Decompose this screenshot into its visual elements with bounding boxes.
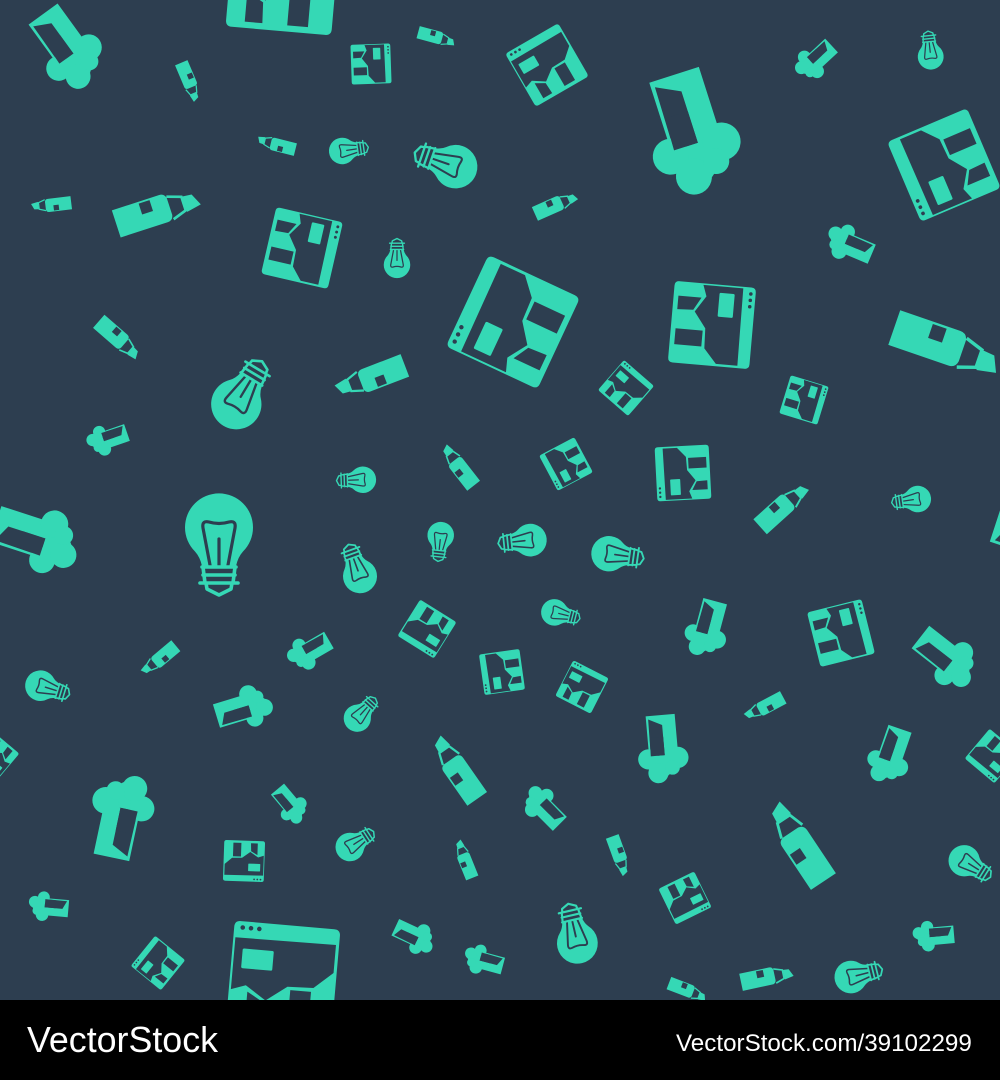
icon: chef hat bbox=[820, 218, 879, 270]
icon: chef hat bbox=[27, 890, 70, 923]
icon: chef hat bbox=[83, 418, 132, 460]
icon: chef hat bbox=[81, 768, 161, 864]
icon: browser map window bbox=[887, 108, 1000, 222]
icon: browser map window bbox=[807, 599, 875, 667]
icon: marker pen bbox=[753, 478, 812, 534]
icon: light bulb bbox=[589, 534, 646, 576]
icon: large marker pen bbox=[888, 310, 1000, 381]
icon: light bulb bbox=[831, 953, 886, 997]
icon: chef hat bbox=[912, 919, 955, 953]
icon: browser map window bbox=[479, 649, 525, 695]
icon: light bulb bbox=[943, 839, 999, 890]
icon: marker pen bbox=[667, 977, 709, 1004]
icon: browser map window bbox=[539, 437, 593, 491]
icon: browser map window bbox=[598, 360, 654, 416]
icon: browser map window wrapped at top edge bbox=[226, 0, 340, 35]
icon: browser map window bbox=[350, 43, 392, 85]
icon: marker pen bbox=[606, 834, 633, 877]
icon: chef hat bbox=[460, 941, 507, 980]
icon: chef hat bbox=[516, 779, 572, 836]
icon: light bulb bbox=[202, 348, 284, 439]
icon: marker pen bbox=[31, 196, 72, 214]
icon: chef hat bbox=[788, 33, 842, 87]
icon: light bulb bbox=[21, 667, 74, 709]
icon: browser map window bbox=[779, 375, 829, 425]
icon: chef hat bbox=[210, 680, 277, 737]
icon: marker pen bbox=[139, 640, 180, 679]
icon: light bulb bbox=[425, 521, 455, 563]
icon: light bulb bbox=[332, 539, 382, 598]
icon: large browser map window bbox=[226, 921, 340, 1035]
icon: browser map window wrapped at left edge bbox=[0, 729, 19, 783]
icon: marker pen bbox=[742, 691, 787, 724]
icon: browser map window bbox=[131, 936, 185, 990]
icon: browser map window bbox=[668, 281, 756, 369]
icon: chef hat bbox=[266, 780, 314, 829]
icon: light bulb bbox=[338, 689, 385, 737]
icon: browser map window bbox=[261, 207, 343, 289]
icon: browser map window bbox=[505, 23, 589, 107]
icon: light bulb bbox=[384, 238, 410, 278]
icon: browser map window bbox=[397, 599, 457, 659]
icon: light bulb bbox=[336, 466, 377, 494]
icon: chef hat bbox=[0, 494, 88, 582]
icon: browser map window bbox=[658, 871, 712, 925]
icon: browser map window bbox=[555, 660, 609, 714]
icon: marker pen bbox=[451, 838, 478, 880]
icon: light bulb bbox=[496, 522, 548, 560]
icon: marker pen bbox=[333, 354, 409, 403]
icon: chef hat wrapped at right edge bbox=[985, 494, 1000, 582]
icon: chef hat bbox=[861, 722, 920, 789]
icon: large light bulb bbox=[185, 493, 253, 595]
icon: marker pen bbox=[256, 134, 297, 156]
icon: chef hat bbox=[388, 913, 440, 960]
icon: large browser map window bbox=[446, 255, 580, 389]
icon: light bulb bbox=[330, 820, 381, 867]
icon: chef hat bbox=[905, 618, 988, 698]
icon: chef hat bbox=[17, 0, 117, 100]
icon: browser map window bbox=[655, 445, 711, 501]
icon: light bulb bbox=[890, 484, 933, 516]
icon: marker pen bbox=[532, 189, 580, 221]
icon: light bulb bbox=[548, 899, 602, 968]
icon: browser map window bbox=[223, 840, 265, 882]
icon: large marker pen bbox=[760, 798, 836, 890]
icon: chef hat bbox=[634, 713, 691, 785]
footer brand wordmark: VectorStock bbox=[27, 1020, 218, 1060]
icon: light bulb bbox=[538, 596, 583, 632]
footer bar bbox=[27, 1020, 972, 1060]
icon: chef hat bbox=[680, 596, 735, 661]
footer image id: VectorStock.com/39102299 bbox=[676, 1030, 972, 1057]
icon: light bulb bbox=[408, 132, 483, 194]
icon: marker pen bbox=[437, 442, 480, 491]
icon: marker pen bbox=[426, 732, 487, 806]
icon: light bulb bbox=[327, 134, 370, 166]
icon: marker pen bbox=[739, 963, 794, 991]
icon: chef hat bbox=[282, 625, 337, 677]
icon: marker pen wrapped at left edge bbox=[0, 310, 5, 381]
icon: browser map window bbox=[965, 729, 1000, 783]
icon: marker pen bbox=[417, 26, 457, 48]
icon: large chef hat bbox=[630, 61, 753, 204]
icon: light bulb bbox=[915, 30, 945, 71]
icon: marker pen bbox=[175, 60, 203, 103]
icon: marker pen bbox=[112, 184, 203, 237]
icon: marker pen bbox=[93, 315, 144, 362]
